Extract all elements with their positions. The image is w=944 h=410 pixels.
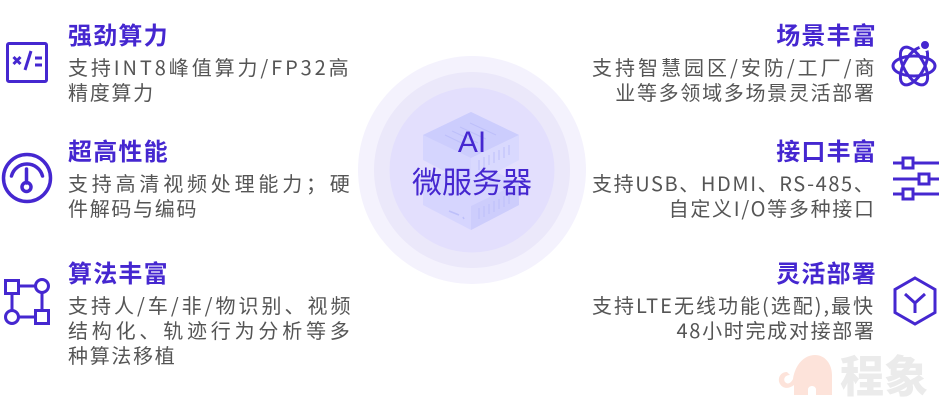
watermark logo: 程象 — [840, 341, 928, 405]
feature: 场景丰富: 支持智慧园区/安防/工厂/商 — [592, 52, 878, 81]
feature: 场景丰富: 业等多领域多场景灵活部署 — [615, 77, 876, 106]
feature: 灵活部署: 支持LTE无线功能(选配),最快 — [592, 290, 875, 319]
feature: 算法丰富: 支持人/车/非/物识别、视频 — [68, 290, 354, 319]
feature: 强劲算力 — [68, 16, 352, 106]
feature: 场景丰富: 场景丰富 — [776, 16, 877, 51]
watermark logo — [778, 341, 928, 405]
feature: 算法丰富: 种算法移植 — [68, 340, 176, 369]
feature: 接口丰富: 支持USB、HDMI、RS-485、 — [592, 168, 875, 197]
feature: 接口丰富: 接口丰富 — [776, 132, 877, 167]
central title — [412, 126, 532, 202]
feature: 超高性能: 件解码与编码 — [68, 193, 198, 222]
feature: 算法丰富 — [68, 254, 354, 369]
feature: 算法丰富: 结构化、轨迹行为分析等多 — [68, 315, 354, 344]
feature: 强劲算力: 精度算力 — [68, 77, 155, 106]
feature: 场景丰富 — [592, 16, 878, 106]
feature: 接口丰富: 自定义I/O等多种接口 — [669, 193, 876, 222]
feature: 算法丰富: 算法丰富 — [68, 254, 169, 289]
central title: 微服务器 — [412, 158, 532, 202]
feature: 超高性能 — [68, 132, 354, 222]
feature: 超高性能: 支持高清视频处理能力；硬 — [68, 168, 354, 197]
feature: 超高性能: 超高性能 — [68, 132, 169, 167]
feature: 灵活部署 — [592, 254, 877, 344]
feature: 灵活部署: 灵活部署 — [776, 254, 877, 289]
feature: 强劲算力: 强劲算力 — [68, 16, 169, 51]
feature: 灵活部署: 48小时完成对接部署 — [676, 315, 876, 344]
feature: 强劲算力: 支持INT8峰值算力/FP32高 — [68, 52, 352, 81]
central title: AI — [458, 126, 486, 159]
feature: 接口丰富 — [592, 132, 877, 222]
